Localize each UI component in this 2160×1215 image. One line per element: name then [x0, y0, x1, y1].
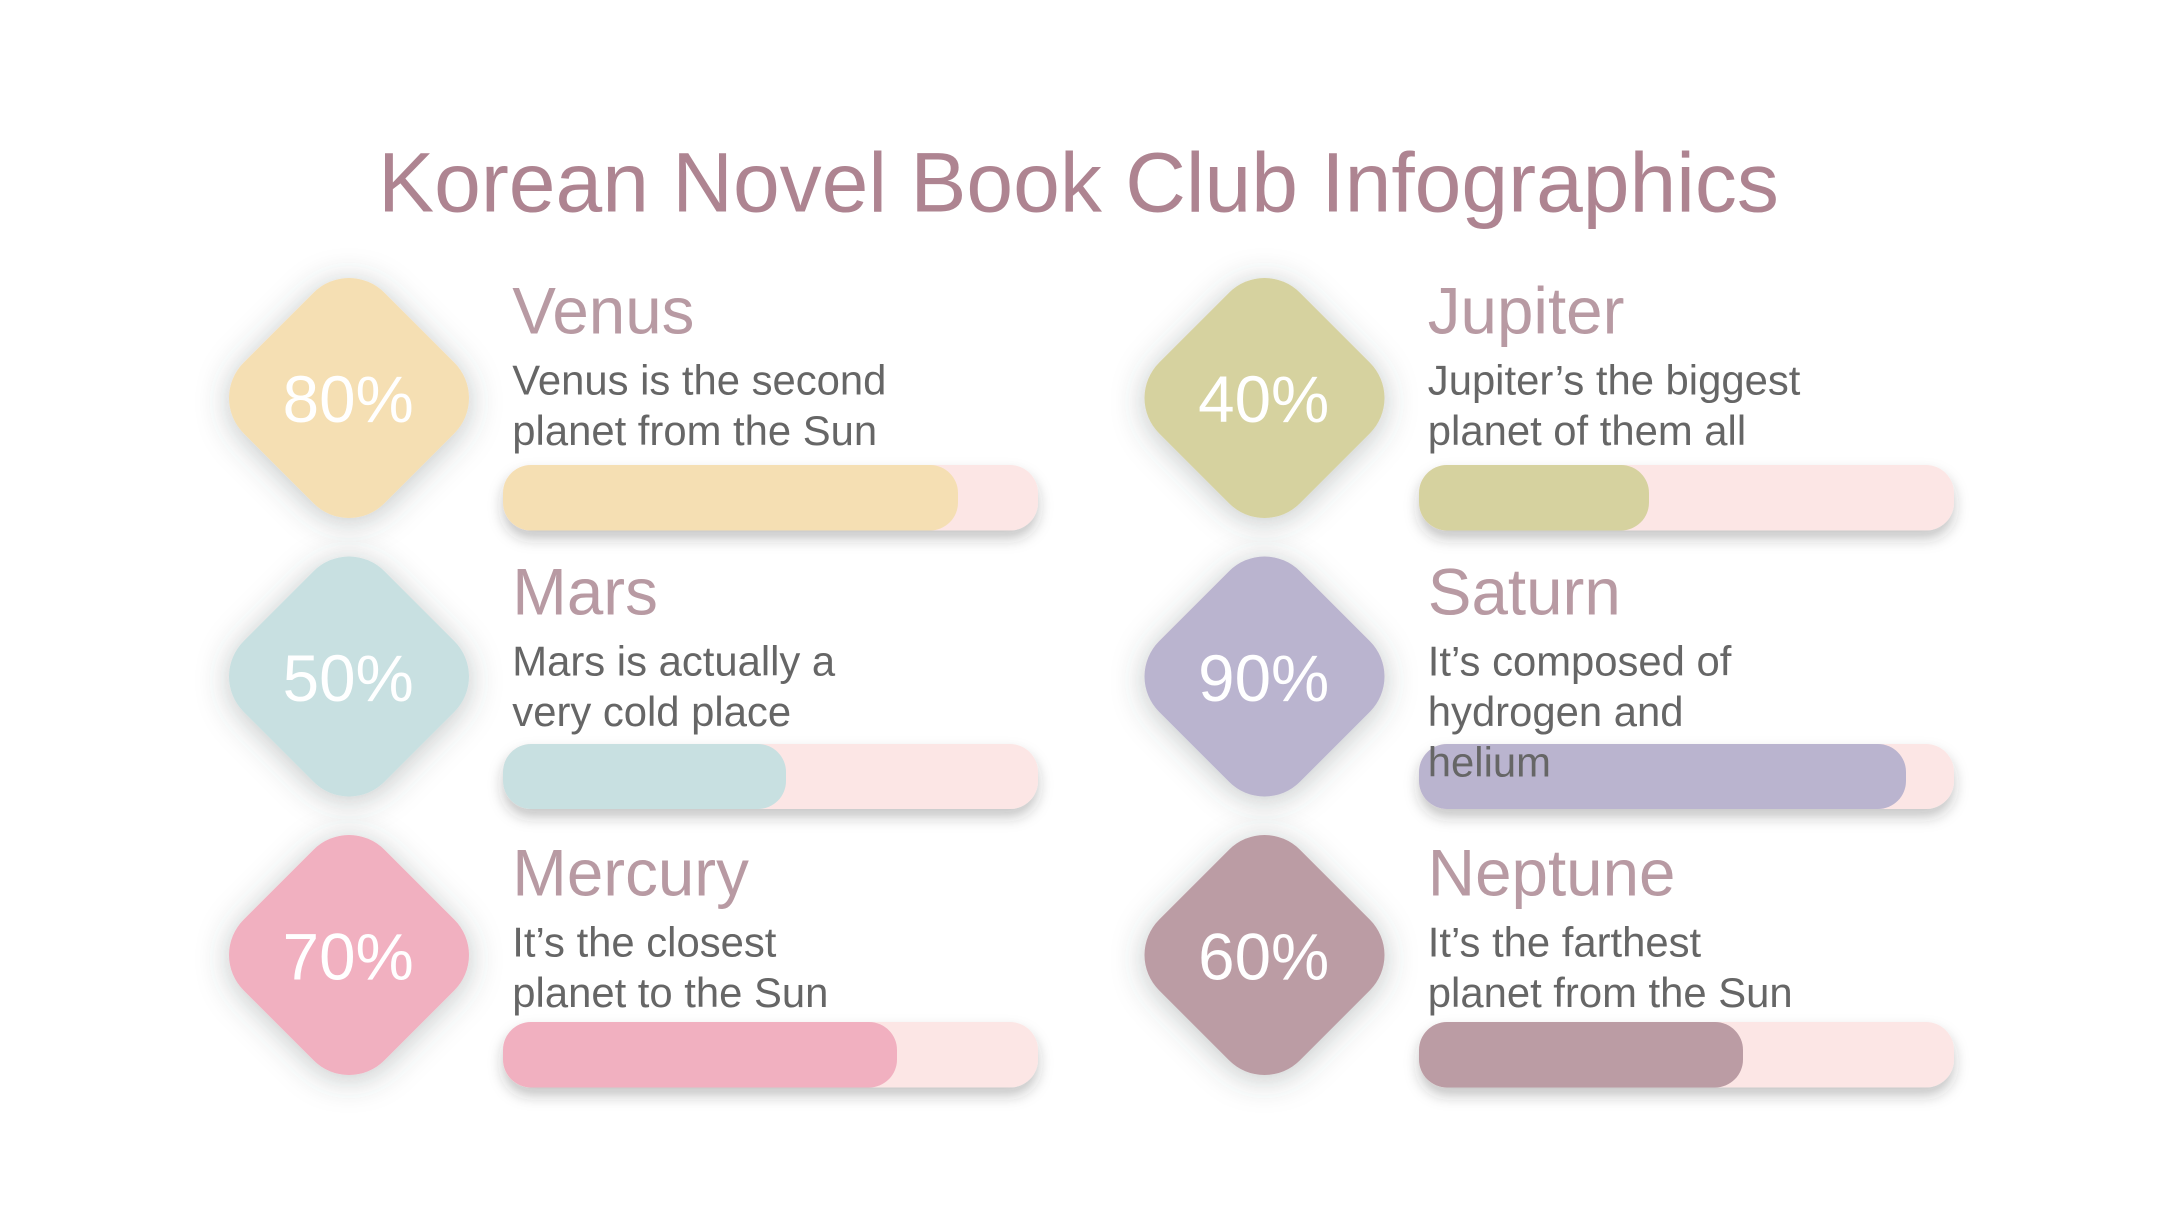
- icon: Mercury diamond: [208, 814, 490, 1096]
- icon: Mars diamond: [208, 536, 490, 817]
- panel: Mercury: [208, 814, 1038, 1096]
- panel: Mars: [208, 536, 1038, 817]
- icon: Neptune diamond: [1124, 814, 1405, 1096]
- description: Mars: Mars is actually a: [512, 637, 836, 684]
- panel: Neptune: [1124, 814, 1954, 1096]
- description: Saturn: hydrogen and: [1428, 688, 1683, 735]
- description: Venus: planet from the Sun: [512, 407, 877, 454]
- title: Korean Novel Book Club Infographics: [378, 136, 1779, 230]
- description: Mercury: It’s the closest: [512, 918, 777, 965]
- panel: Venus: [208, 257, 1038, 539]
- percentage: Mercury: 70%: [283, 920, 414, 993]
- progress bar: Venus: [503, 465, 1038, 530]
- description: Venus: Venus is the second: [512, 356, 886, 403]
- panel: Saturn: [1124, 536, 1954, 817]
- heading: Neptune: Neptune: [1428, 836, 1675, 910]
- progress bar: Mars: [503, 744, 1038, 809]
- percentage: Jupiter: 40%: [1198, 363, 1329, 436]
- progress bar: Saturn: [1419, 744, 1954, 809]
- percentage: Mars: 50%: [283, 642, 414, 715]
- progress bar: Neptune: [1419, 1022, 1954, 1088]
- description: Saturn: It’s composed of: [1428, 637, 1732, 684]
- description: Neptune: planet from the Sun: [1428, 969, 1793, 1016]
- heading: Venus: Venus: [512, 274, 694, 348]
- heading: Jupiter: Jupiter: [1428, 274, 1624, 348]
- heading: Mars: Mars: [512, 556, 658, 628]
- icon: Venus diamond: [208, 257, 490, 539]
- percentage: Venus: 80%: [283, 363, 414, 436]
- description: Mars: very cold place: [512, 688, 791, 735]
- progress bar: Jupiter: [1419, 465, 1954, 530]
- panel: Jupiter: [1124, 257, 1954, 539]
- description: Jupiter: planet of them all: [1428, 407, 1746, 454]
- progress bar: Mercury: [503, 1022, 1038, 1088]
- description: Jupiter: Jupiter’s the biggest: [1428, 356, 1801, 403]
- description: Saturn: helium: [1428, 738, 1551, 785]
- heading: Mercury: Mercury: [512, 836, 749, 910]
- heading: Saturn: Saturn: [1428, 556, 1621, 628]
- icon: Jupiter diamond: [1124, 257, 1405, 539]
- description: Neptune: It’s the farthest: [1428, 918, 1702, 965]
- percentage: Saturn: 90%: [1198, 642, 1329, 715]
- percentage: Neptune: 60%: [1198, 920, 1329, 993]
- description: Mercury: planet to the Sun: [512, 969, 828, 1016]
- icon: Saturn diamond: [1124, 536, 1405, 817]
